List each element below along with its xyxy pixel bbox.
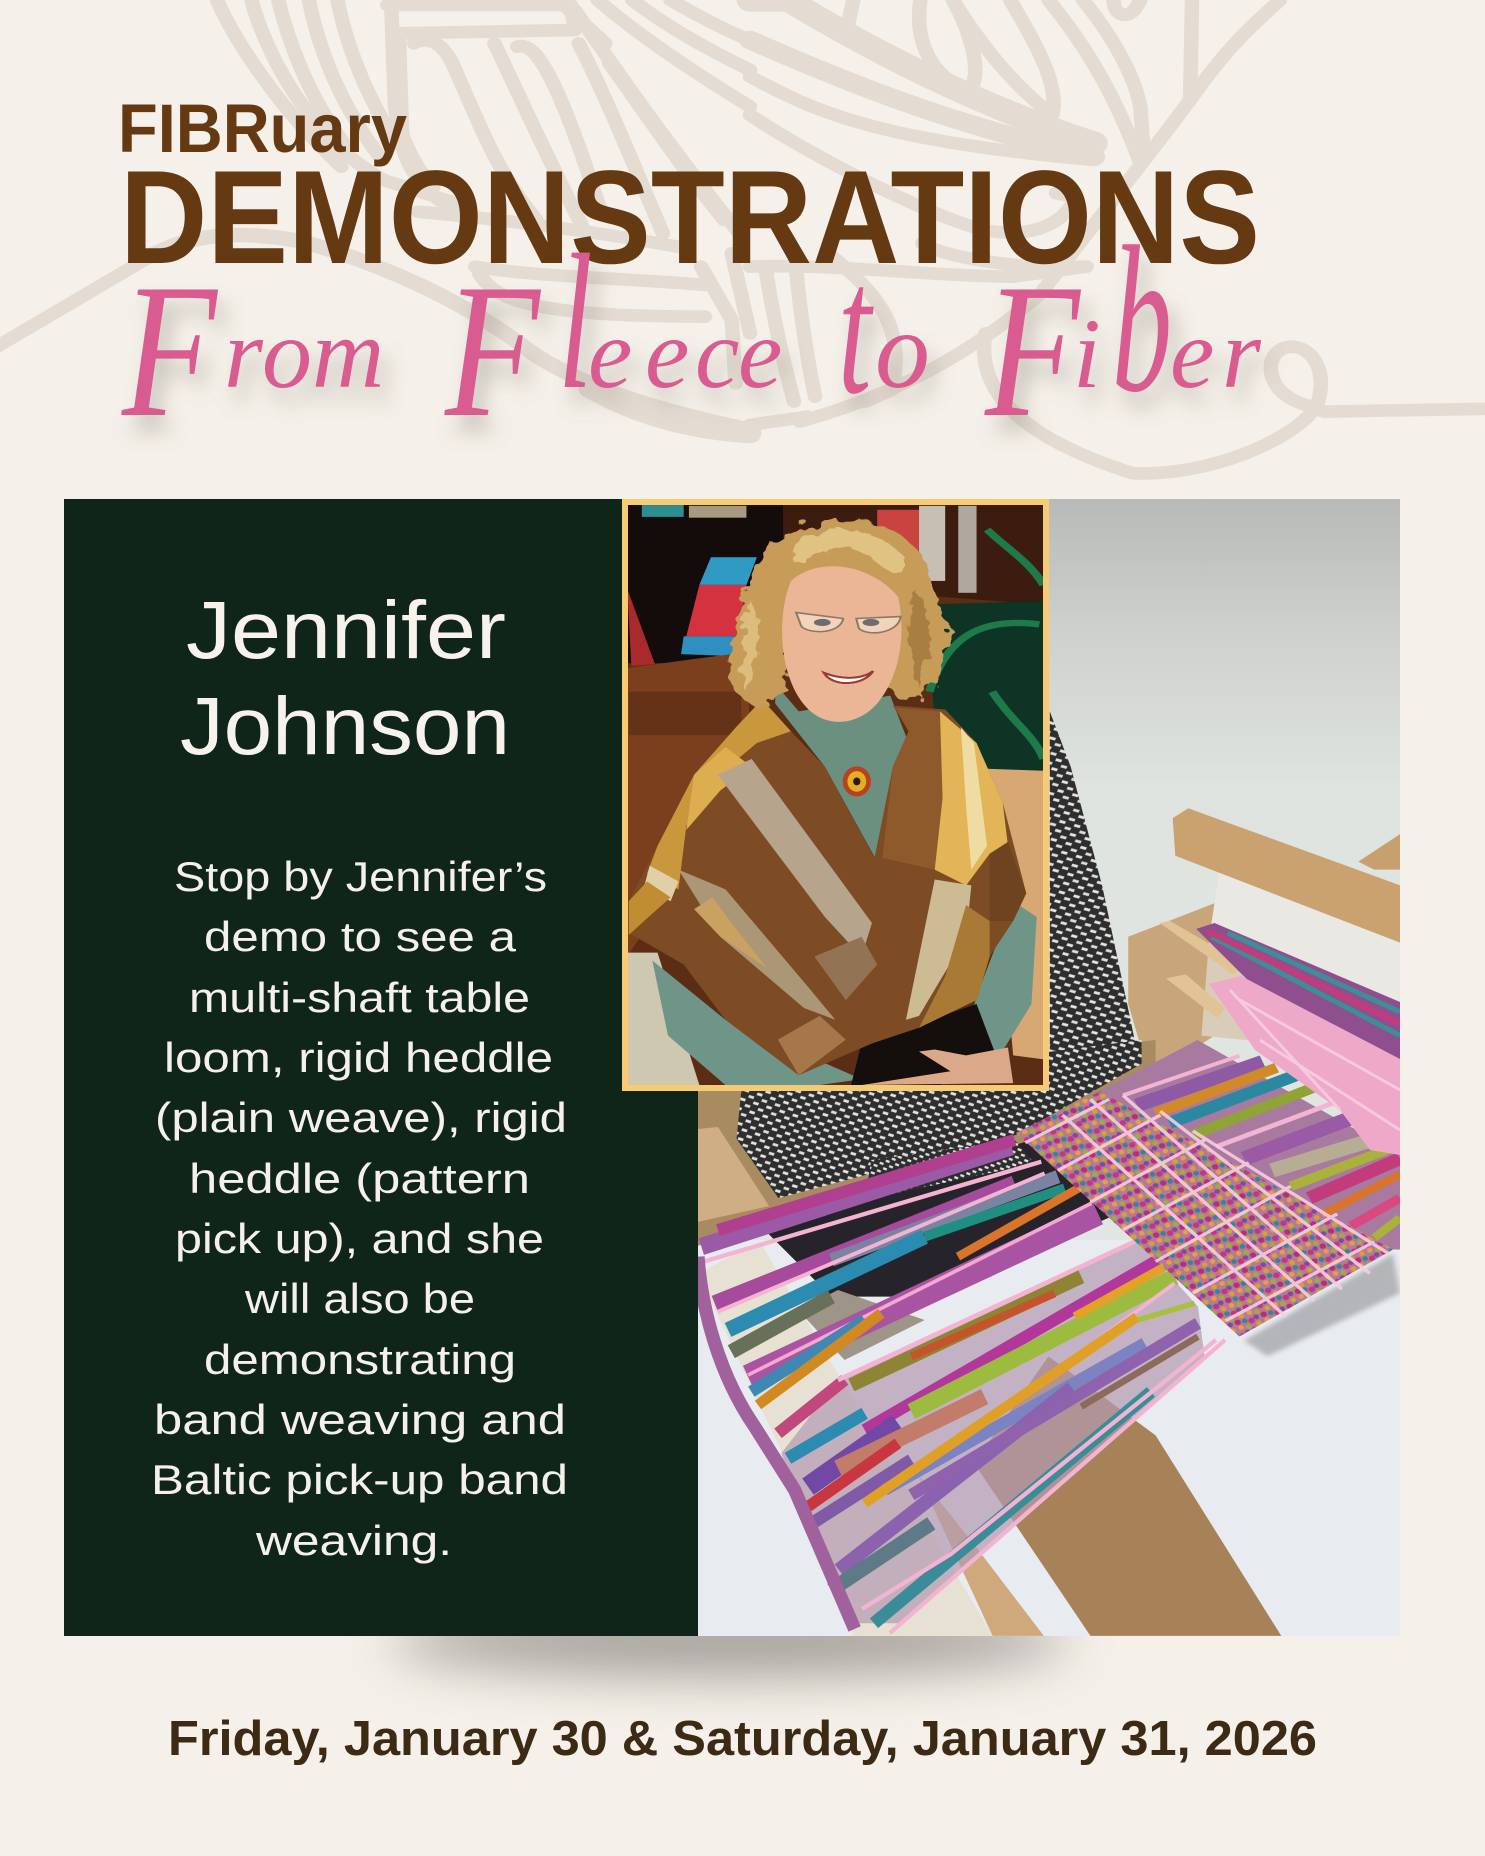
panel drop shadow [390,1604,1070,1676]
face [782,566,902,722]
demo description text: demo to see a [204,913,517,960]
subtitle script: From Fleece to Fiber: e [588,298,632,409]
demo description text: demonstrating [204,1336,516,1383]
subtitle script: From Fleece to Fiber: e [738,298,782,409]
photo: portrait of Jennifer Johnson [627,505,1044,1085]
demo description text: pick up), and she [175,1215,544,1262]
heading: FIBRuary: FIBRuary [118,90,407,167]
speaker name: Jennifer [186,585,506,676]
photo: rigid heddle loom with weaving [698,499,1400,1636]
panel: biography background [64,499,698,1636]
demo description text: heddle (pattern [189,1155,530,1202]
heading: DEMONSTRATIONS: DEMONSTRATIONS [120,144,1260,292]
subtitle script: From Fleece to Fiber [121,203,1262,457]
yarn ball illustration [0,0,1485,473]
photo frame: portrait border [622,499,1049,1091]
demo description text: will also be [244,1275,475,1322]
brooch [843,766,871,796]
demo description text: loom, rigid heddle [164,1034,553,1081]
demo description text: Baltic pick-up band [151,1456,568,1503]
demo description text [151,853,568,1564]
subtitle script: From Fleece to Fiber: r [1222,298,1262,409]
demo description text: (plain weave), rigid [155,1094,567,1141]
speaker name [180,585,510,772]
subtitle script: From Fleece to Fiber: F [444,245,541,457]
subtitle script: From Fleece to Fiber: m [312,298,384,409]
demo description text: Stop by Jennifer’s [174,853,547,900]
subtitle script: From Fleece to Fiber: t [838,227,874,432]
subtitle script: From Fleece to Fiber: e [645,298,689,409]
woven shawl [629,700,1026,1075]
event dates: Friday, January 30 & Saturday, January 31, 2026 [168,1712,1317,1766]
subtitle script: From Fleece to Fiber: o [875,289,930,411]
subtitle script: From Fleece to Fiber: e [1170,298,1214,409]
subtitle script: From Fleece to Fiber: b [1112,203,1172,435]
subtitle script: From Fleece to Fiber: F [121,245,218,457]
demo description text: band weaving and [154,1396,566,1443]
subtitle script: From Fleece to Fiber: c [695,298,739,409]
subtitle script: From Fleece to Fiber: i [1073,298,1101,409]
demo description text: weaving. [255,1517,452,1564]
demo description text: multi-shaft table [189,974,530,1021]
subtitle script: From Fleece to Fiber: l [558,216,593,430]
subtitle script: From Fleece to Fiber: o [262,298,312,409]
subtitle script: From Fleece to Fiber: r [224,298,264,409]
bookshelf background [627,505,1044,1085]
subtitle script: From Fleece to Fiber: F [984,245,1081,457]
arms and clothing [652,684,1037,1085]
speaker name: Johnson [180,681,510,772]
curly hair [728,520,950,707]
